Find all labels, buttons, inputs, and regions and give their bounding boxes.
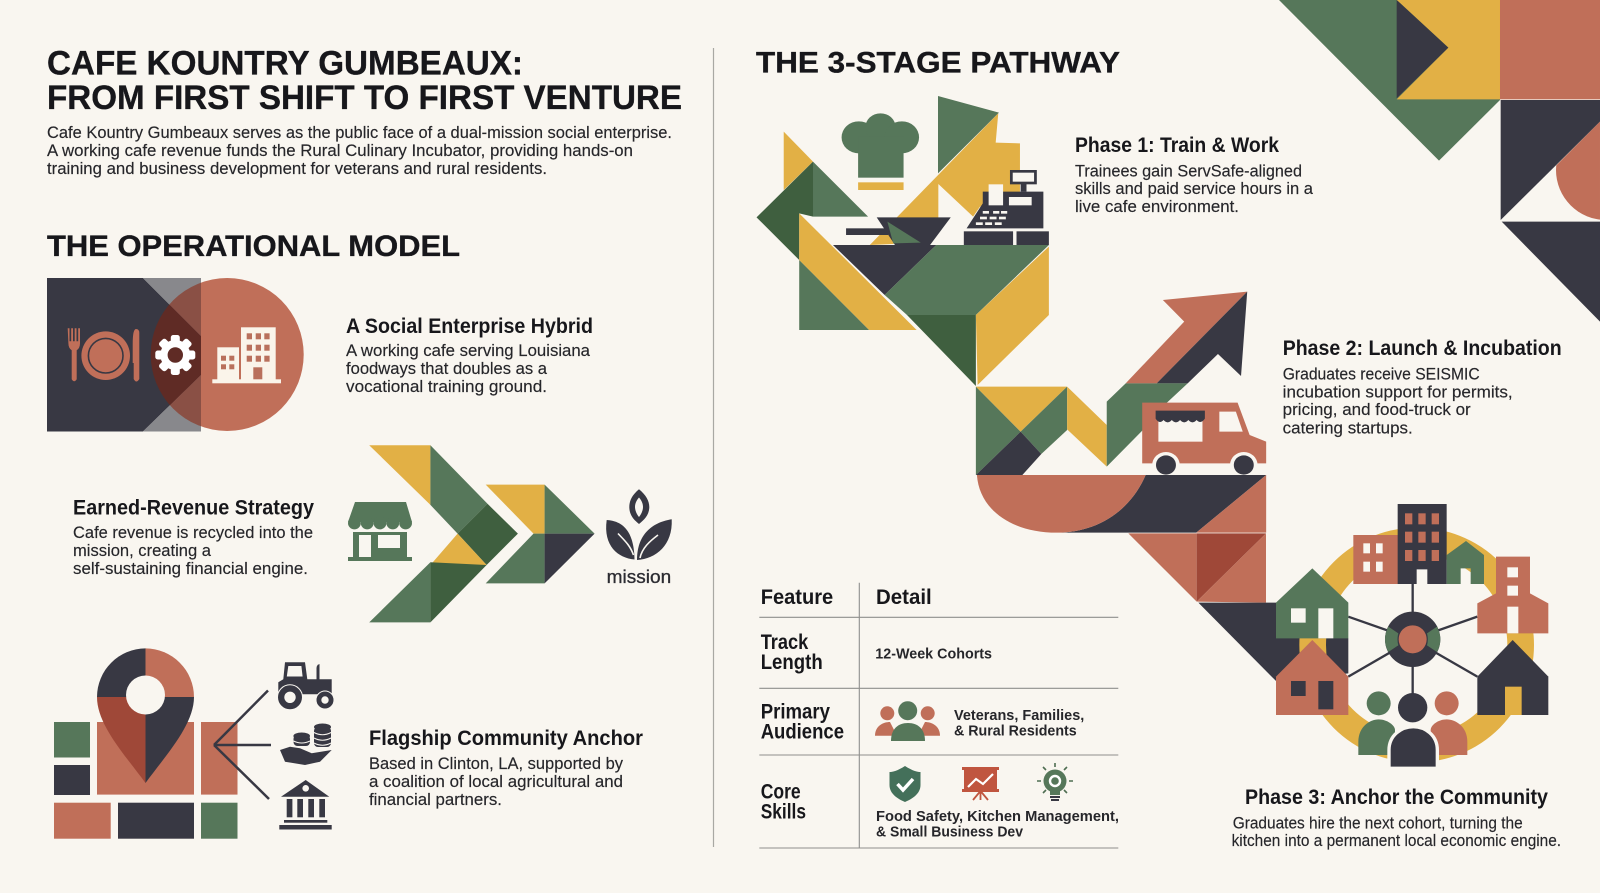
icon: bank (279, 780, 332, 830)
title (47, 44, 682, 117)
row: primary audience: & Rural Residents (954, 724, 1077, 740)
panel: phase 2: pricing, and food-truck or (1283, 401, 1471, 419)
row: primary audience (761, 700, 1084, 743)
table header (761, 586, 932, 609)
panel: flagship community anchor (54, 648, 643, 839)
panel: phase 2: Phase 2: Launch & Incubation (1283, 337, 1562, 360)
icon: fork plate knife (68, 328, 139, 382)
row: core skills: Skills (761, 800, 806, 823)
icon: buildings (1353, 504, 1548, 633)
table: feature detail (759, 583, 1119, 848)
icon: gear (155, 335, 195, 375)
table header: Detail (876, 586, 932, 609)
row: core skills: & Small Business Dev (876, 825, 1023, 841)
pathway stage 2: tangram (976, 292, 1266, 533)
corner decoration (1279, 0, 1600, 322)
text: social enterprise hybrid (346, 342, 591, 396)
icon: location pin (97, 648, 194, 783)
panel: phase 2: incubation support for permits, (1283, 383, 1513, 401)
icon: map blocks (54, 722, 238, 839)
text: social enterprise hybrid: A working cafe serving Louisiana (346, 342, 591, 360)
icon: venn of cafe and enterprise (47, 278, 304, 432)
icon: hand with coins (280, 724, 332, 765)
text: flagship community anchor: a coalition of local agricultural and (369, 773, 623, 791)
icon: houses (1276, 568, 1548, 715)
pathway stage 1: tangram (757, 96, 1049, 386)
icon: bowl and spoon (846, 217, 951, 245)
intro text: A working cafe revenue funds the Rural Culinary Incubator, providing hands-on (47, 142, 633, 160)
hub (1385, 612, 1440, 667)
title: FROM FIRST SHIFT TO FIRST VENTURE (47, 79, 682, 117)
arrow: growth (1126, 292, 1247, 383)
text: earned-revenue strategy: self-sustaining financial engine. (73, 560, 308, 578)
network lines (1348, 582, 1477, 695)
row: track length (761, 631, 992, 674)
icon: audience people (875, 701, 940, 741)
icon: cash register (964, 171, 1049, 245)
row: primary audience: Primary (761, 700, 830, 723)
text: flagship community anchor: financial partners. (369, 791, 502, 809)
heading: flagship community anchor: Flagship Community Anchor (369, 727, 643, 750)
panel: phase 2: Graduates receive SEISMIC (1283, 365, 1480, 383)
heading: 3-stage pathway: THE 3-STAGE PATHWAY (756, 46, 1120, 80)
panel: phase 3 (1232, 786, 1561, 850)
row: primary audience: Audience (761, 720, 844, 743)
icon: lightbulb gear (1037, 763, 1073, 801)
panel: phase 1 (1075, 134, 1314, 216)
panel: phase 3: Phase 3: Anchor the Community (1245, 786, 1548, 809)
text: social enterprise hybrid: vocational training ground. (346, 378, 547, 396)
row: core skills: Core (761, 780, 801, 803)
text: social enterprise hybrid: foodways that doubles as a (346, 360, 548, 378)
icon: buildings (212, 327, 281, 383)
panel: phase 2: catering startups. (1283, 419, 1413, 437)
panel: earned-revenue strategy (73, 445, 672, 622)
panel: phase 1: Phase 1: Train & Work (1075, 134, 1279, 157)
row: primary audience: Veterans, Families, (954, 708, 1084, 724)
panel: social enterprise hybrid (47, 278, 593, 432)
row: track length: Track (761, 631, 809, 654)
icon: storefront (348, 502, 412, 561)
label: mission: mission (607, 567, 671, 587)
icon: food truck (1142, 403, 1266, 478)
arrow: small chevron (486, 485, 595, 583)
title: CAFE KOUNTRY GUMBEAUX: (47, 44, 523, 82)
text: flagship community anchor (369, 755, 624, 809)
panel: phase 3: kitchen into a permanent local economic engine. (1232, 832, 1561, 850)
row: core skills (761, 763, 1119, 841)
panel: phase 1: skills and paid service hours in a (1075, 180, 1314, 198)
text: flagship community anchor: Based in Clinton, LA, supported by (369, 755, 624, 773)
panel: phase 1: Trainees gain ServSafe-aligned (1075, 162, 1302, 180)
icon: people (1358, 691, 1467, 768)
text: earned-revenue strategy: Cafe revenue is recycled into the (73, 524, 313, 542)
table header: Feature (761, 586, 833, 609)
text: earned-revenue strategy (73, 524, 313, 578)
heading: operational model: THE OPERATIONAL MODEL (47, 230, 460, 263)
icon: shield (890, 766, 920, 802)
panel: phase 2 (1283, 337, 1562, 437)
icon: mission leaves (606, 489, 672, 560)
connector lines (214, 690, 271, 799)
text: earned-revenue strategy: mission, creating a (73, 542, 212, 560)
heading: earned-revenue strategy: Earned-Revenue Strategy (73, 496, 314, 520)
row: track length: 12-Week Cohorts (875, 646, 992, 662)
row: track length: Length (761, 651, 823, 674)
icon: tractor (278, 662, 334, 710)
heading: social enterprise hybrid: A Social Enterprise Hybrid (346, 315, 593, 338)
arrow: large chevron (369, 445, 518, 622)
panel: phase 3: Graduates hire the next cohort, turning the (1233, 815, 1523, 833)
yellow ring (1313, 541, 1521, 749)
pathway stage 3: community hub (1128, 504, 1548, 768)
icon: presentation board (962, 767, 999, 800)
intro text (47, 124, 672, 178)
panel: phase 1: live cafe environment. (1075, 198, 1239, 216)
icon: chef hat (842, 113, 919, 190)
row: core skills: Food Safety, Kitchen Management, (876, 809, 1119, 825)
intro text: training and business development for veterans and rural residents. (47, 160, 547, 178)
intro text: Cafe Kountry Gumbeaux serves as the public face of a dual-mission social enterprise. (47, 124, 672, 142)
